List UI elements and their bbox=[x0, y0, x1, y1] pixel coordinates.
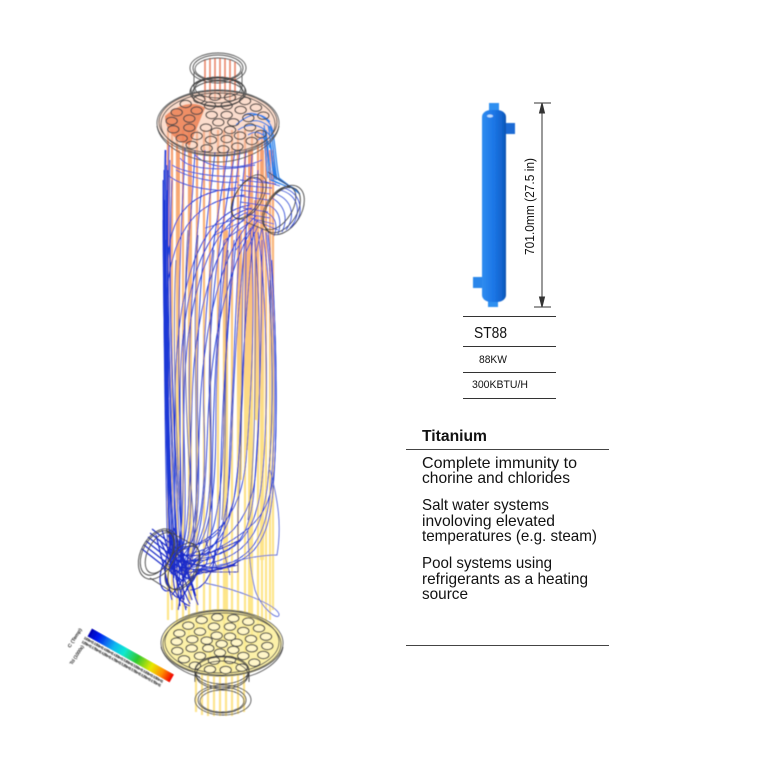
top flange bbox=[190, 53, 246, 92]
side nozzle outlines bbox=[225, 169, 313, 242]
scale labels: 3.250e+01 3.750e+01 4.250e+01 4.750e+01 5.250e+01 5.750e+01 6.250e+01 6.750e+01 bbox=[81, 639, 162, 688]
benefit 3: refrigerants as a heating bbox=[422, 571, 588, 588]
scale title: C (Temp) bbox=[67, 627, 83, 649]
benefit 2: temperatures (e.g. steam) bbox=[422, 528, 597, 545]
scale labels: 3.000e+01 3.500e+01 4.000e+01 4.500e+01 5.000e+01 5.500e+01 6.000e+01 6.500e+01 bbox=[83, 635, 165, 684]
power BTU: 300KBTU/H bbox=[472, 379, 528, 391]
cylinder body bbox=[482, 110, 506, 302]
benefit 2 bbox=[422, 497, 597, 545]
colour scale legend bbox=[67, 627, 174, 688]
top tube sheet fill bbox=[158, 91, 278, 155]
benefit 3 bbox=[422, 555, 588, 603]
bottom tube sheet fill bbox=[162, 609, 282, 677]
product illustration: blue heat exchanger bbox=[473, 103, 515, 307]
blue flow lines bbox=[142, 145, 279, 617]
red hot zone bbox=[165, 104, 205, 145]
benefit 1: chorine and chlorides bbox=[422, 470, 570, 487]
scale title bbox=[67, 627, 85, 666]
benefit 1: Complete immunity to bbox=[422, 455, 577, 472]
power kW: 88KW bbox=[479, 354, 508, 366]
left side stub bbox=[473, 277, 484, 288]
spec table bbox=[463, 316, 556, 398]
dimension label: 701.0mm (27.5 in) bbox=[522, 158, 537, 255]
top sheet holes bbox=[166, 93, 269, 153]
benefit 1 bbox=[422, 455, 577, 487]
panel heading: Titanium bbox=[422, 428, 487, 445]
benefit 3: source bbox=[422, 586, 468, 603]
light blue flow into side nozzle bbox=[236, 113, 300, 194]
benefit 2: involoving elevated bbox=[422, 513, 555, 530]
right side stub bbox=[504, 123, 515, 134]
material panel bbox=[406, 428, 609, 646]
flow simulation diagram bbox=[130, 53, 313, 716]
model name: ST88 bbox=[474, 325, 507, 342]
benefit 3: Pool systems using bbox=[422, 555, 552, 572]
bottom sheet holes bbox=[171, 614, 273, 674]
top neck bbox=[190, 77, 246, 107]
scale title: Tci (1000s) bbox=[69, 644, 85, 666]
bottom tube sheet bbox=[161, 610, 283, 677]
tube bundle streamlines bbox=[168, 58, 273, 716]
bottom neck bbox=[195, 656, 249, 689]
top tube sheet bbox=[157, 90, 279, 162]
scale labels bbox=[81, 635, 165, 688]
benefit 2: Salt water systems bbox=[422, 497, 549, 514]
bottom flange bbox=[195, 685, 251, 715]
top stub bbox=[489, 103, 499, 111]
bottom stub bbox=[488, 300, 498, 307]
dimension arrow bbox=[534, 103, 551, 307]
lower left nozzle outlines bbox=[130, 522, 207, 608]
colour bar bbox=[88, 629, 174, 682]
side nozzle fan lines bbox=[168, 155, 300, 252]
highlight bbox=[487, 114, 493, 118]
